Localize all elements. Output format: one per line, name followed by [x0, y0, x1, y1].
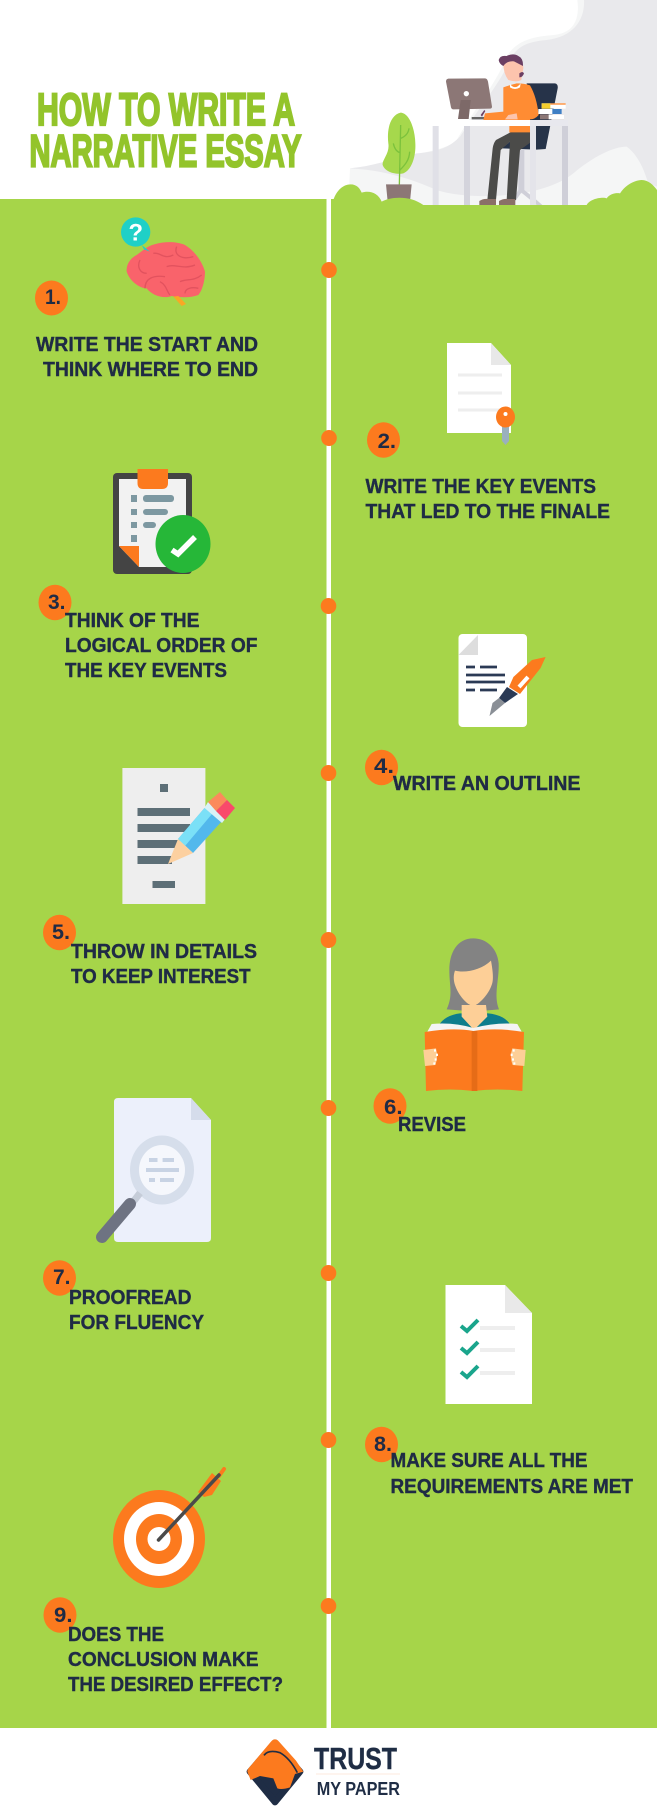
icon: person — [479, 54, 539, 205]
text: step 2: THAT LED TO THE FINALE — [366, 501, 610, 523]
step 1 — [35, 217, 258, 381]
number badge 6: 6. — [384, 1096, 402, 1119]
number badge 3: 3. — [48, 591, 66, 614]
icon: document with pin — [447, 343, 515, 445]
icon: page with pencil — [122, 768, 235, 904]
text: brand name: TRUST — [314, 1741, 397, 1776]
text: step 7: PROOFREAD — [69, 1287, 192, 1309]
icon: target with arrow — [113, 1469, 224, 1588]
step 4 — [365, 634, 580, 795]
text: step 2 — [366, 476, 610, 523]
number badge 7 — [43, 1260, 76, 1296]
icon: clipboard with check — [113, 469, 210, 574]
number badge 9: 9. — [54, 1604, 72, 1627]
icon: desk — [433, 120, 568, 205]
text: step 7 — [69, 1287, 205, 1334]
icon: chair — [502, 83, 558, 205]
text: brand name — [314, 1741, 400, 1799]
number badge 2: 2. — [378, 430, 396, 453]
number badge 7: 7. — [53, 1266, 70, 1289]
title — [30, 84, 302, 176]
hero illustration background — [348, 0, 657, 207]
text: step 1 — [36, 334, 258, 381]
icon: brain — [121, 217, 205, 306]
text: step 2: WRITE THE KEY EVENTS — [366, 476, 596, 498]
number badge 3 — [38, 585, 72, 620]
icon: books — [538, 103, 566, 119]
number badge 5: 5. — [52, 921, 70, 944]
step 8 — [365, 1285, 633, 1498]
text: step 9: CONCLUSION MAKE — [68, 1649, 259, 1671]
number badge 8: 8. — [374, 1433, 392, 1456]
number badge 4: 4. — [374, 755, 394, 778]
green hills — [333, 180, 657, 220]
text: step 3: THINK OF THE — [65, 610, 200, 632]
icon: monitor — [446, 78, 502, 119]
text: step 8 — [390, 1450, 633, 1498]
text: step 7: FOR FLUENCY — [69, 1312, 205, 1334]
text: step 5: TO KEEP INTEREST — [71, 966, 251, 988]
text: step 1: WRITE THE START AND — [36, 334, 258, 356]
step 6 — [374, 938, 526, 1136]
icon: handshake diamond — [247, 1739, 303, 1802]
text: step 3: THE KEY EVENTS — [65, 660, 227, 682]
number badge 1: 1. — [45, 286, 61, 309]
text: step 4: WRITE AN OUTLINE — [393, 773, 580, 795]
text: step 8: REQUIREMENTS ARE MET — [390, 1476, 633, 1498]
text: step 9: THE DESIRED EFFECT? — [68, 1674, 283, 1696]
text: step 9 — [68, 1624, 283, 1696]
text: step 5 — [71, 941, 257, 988]
footer logo — [247, 1739, 400, 1802]
number badge 5 — [43, 915, 76, 950]
number badge 9 — [44, 1597, 76, 1633]
icon: page with fountain pen — [458, 634, 546, 727]
number badge 2 — [367, 422, 400, 458]
text: step 9: DOES THE — [68, 1624, 164, 1646]
number badge 1 — [35, 280, 68, 316]
step 7 — [43, 1098, 211, 1334]
number badge 8 — [365, 1427, 398, 1462]
step 5 — [43, 768, 257, 988]
text: step 3: LOGICAL ORDER OF — [65, 635, 258, 657]
illustration: person at desk — [383, 54, 568, 205]
text: step 5: THROW IN DETAILS — [71, 941, 257, 963]
text: brand name: MY PAPER — [317, 1778, 400, 1799]
title: HOW TO WRITE A — [37, 84, 295, 135]
icon: document with magnifier — [102, 1098, 211, 1242]
text: step 6: REVISE — [398, 1114, 466, 1136]
icon: woman reading — [423, 938, 526, 1091]
icon: plant — [383, 113, 415, 202]
number badge 6 — [374, 1088, 406, 1124]
icon: brain: ? — [128, 220, 143, 247]
step 3 — [38, 469, 258, 682]
title: NARRATIVE ESSAY — [30, 126, 302, 176]
text: step 1: THINK WHERE TO END — [43, 359, 258, 381]
icon: checklist document — [446, 1285, 532, 1404]
step 2 — [366, 343, 610, 523]
text: step 3 — [65, 610, 258, 682]
text: step 8: MAKE SURE ALL THE — [390, 1450, 588, 1472]
timeline line with dots — [321, 199, 337, 1728]
number badge 4 — [365, 750, 398, 785]
step 9 — [44, 1469, 283, 1696]
